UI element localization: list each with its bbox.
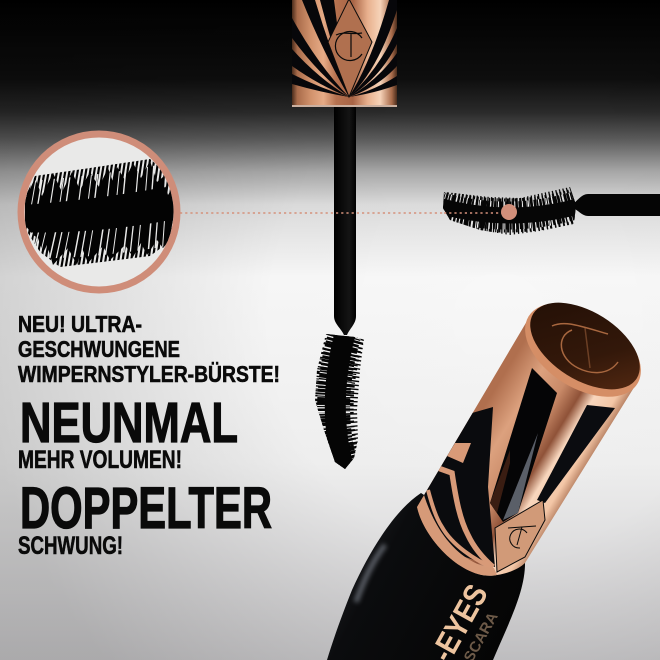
- horizontal brush with handle: [440, 194, 660, 220]
- dotted line over brush: [444, 212, 505, 214]
- claim: double curl: SCHWUNG!: [18, 532, 123, 560]
- claim: nine times volume: NEUNMAL: [20, 391, 238, 455]
- embossed lid logo: [552, 324, 618, 373]
- bristles: [440, 204, 580, 216]
- dotted callout line: [180, 212, 505, 214]
- fan stripes: [447, 443, 471, 463]
- lower rim band: [417, 495, 497, 576]
- spiral brush: [334, 334, 345, 470]
- subhead: new brush: NEU! ULTRA-: [18, 311, 142, 337]
- light gaps between bristles: [11, 172, 184, 246]
- claim: double curl: DOPPELTER: [20, 476, 272, 541]
- fine bristle hairs: [5, 204, 189, 220]
- black tube body: [327, 493, 525, 660]
- subhead: new brush: WIMPERNSTYLER-BÜRSTE!: [18, 361, 280, 387]
- brown reflection: [490, 450, 510, 513]
- grey reflection wedge: [503, 433, 538, 520]
- top cap: [292, 0, 397, 107]
- small diamond with logo: [495, 500, 545, 572]
- diamond with logo: [328, 0, 372, 97]
- left black fan: [423, 407, 495, 567]
- subhead: new brush: [18, 311, 280, 387]
- headline text block: [18, 311, 280, 560]
- callout dot: [501, 204, 517, 220]
- magnified lash circle: [5, 134, 189, 290]
- lid top: [530, 302, 640, 390]
- large angled mascara tube: [327, 302, 641, 660]
- wand stem: [334, 106, 356, 335]
- claim: nine times volume: MEHR VOLUMEN!: [18, 446, 182, 474]
- magnified bristles: [25, 161, 176, 265]
- right black panel: [537, 405, 615, 503]
- lid rim: [525, 304, 641, 397]
- upright mascara wand with rose gold cap: [292, 0, 397, 470]
- claim: double curl: [18, 476, 272, 560]
- claim: nine times volume: [18, 391, 238, 474]
- art deco fan pattern: [292, 0, 397, 97]
- subhead: new brush: GESCHWUNGENE: [18, 336, 180, 362]
- central black panel: [490, 368, 557, 522]
- body highlight: [356, 545, 385, 602]
- rose gold cap: [417, 322, 634, 576]
- handle: [573, 194, 660, 216]
